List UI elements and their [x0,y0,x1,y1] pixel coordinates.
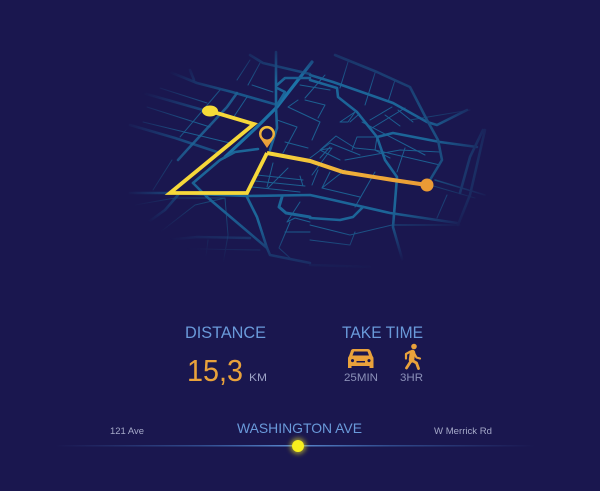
distance unit: KM [249,372,267,384]
street map [130,52,485,270]
car time label: 25MIN [344,372,378,384]
icon: walking person [406,344,420,368]
darker roads [334,54,486,222]
orange route [267,153,427,185]
right street label: W Merrick Rd [434,426,492,437]
heading: take time: TAKE TIME [342,323,423,342]
yellow route [170,111,427,193]
walk time label: 3HR [400,372,423,384]
route start point [202,106,218,116]
heading: distance: DISTANCE [185,323,266,342]
current street label: WASHINGTON AVE [237,420,362,436]
icon: location pin [259,126,275,148]
major roads [130,52,477,263]
position slider [55,438,535,454]
route end point [420,178,434,192]
icon: car [348,349,374,368]
minor streets [143,60,460,258]
infographic canvas [74,50,516,457]
faint streets [145,110,475,255]
distance value: 15,3 [187,353,243,388]
left street label: 121 Ave [110,426,144,437]
